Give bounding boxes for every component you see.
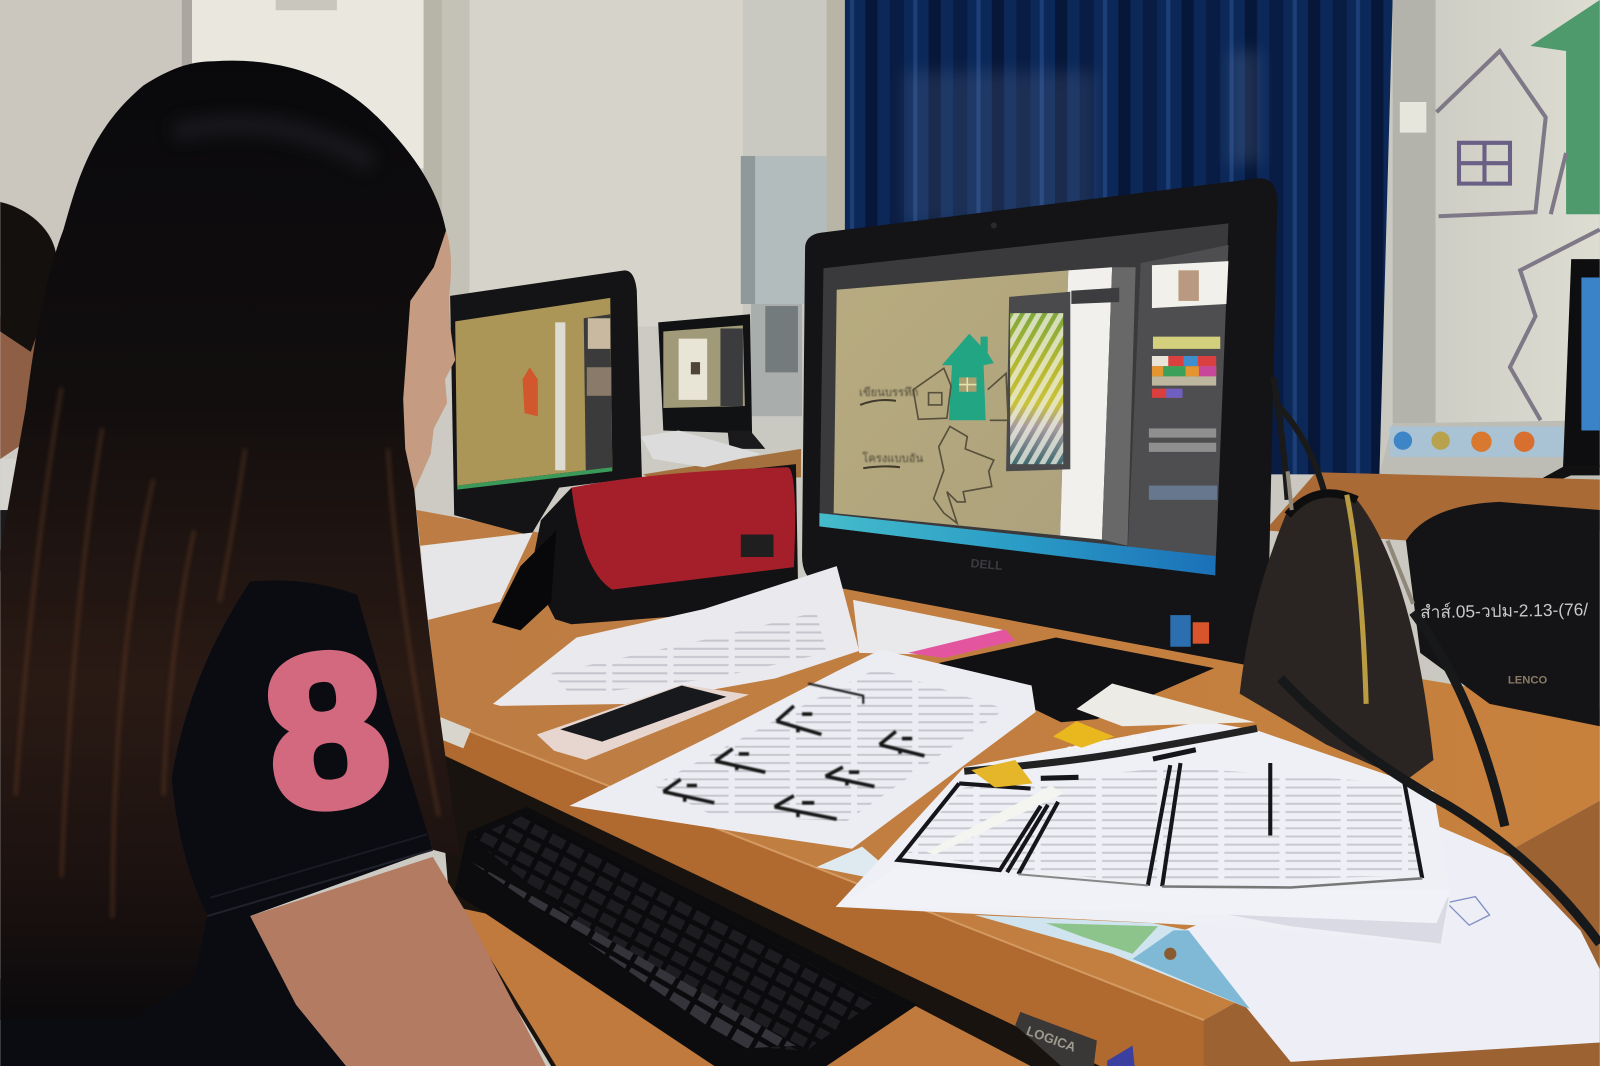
white stylus pen: [926, 785, 1063, 855]
main monitor: DELL: [970, 556, 1004, 573]
black chair: [1406, 502, 1600, 726]
colour swatches panel: [1152, 356, 1216, 398]
black chair: สำส์.05-วปม-2.13-(76/: [1420, 599, 1588, 622]
large form sheet: [836, 721, 1451, 947]
form frame lines: [898, 728, 1422, 887]
back desks: [643, 449, 1600, 541]
sheet and pink marker behind monitor: [853, 600, 1015, 658]
bottom logo label: [1015, 1012, 1135, 1066]
monitor screen: [819, 223, 1228, 575]
monitor stand: [939, 638, 1214, 722]
swatch window: [1006, 288, 1119, 471]
woman: long dark hair: [0, 61, 460, 1020]
woman: face: [388, 231, 455, 491]
blue leaflet: [816, 847, 1250, 1009]
workbook: [569, 650, 1036, 849]
large form sheet: ภาพรวมโครงสร้าง: [1065, 731, 1148, 756]
sheet at handbag foot: [1076, 683, 1255, 726]
yellow candy wrappers: [971, 721, 1114, 788]
drawing: green house and map: โครงแบบอัน: [862, 451, 923, 465]
sheet left of bag: [421, 532, 533, 620]
papers on back desk: [641, 430, 760, 467]
black chair: LENCO: [1508, 674, 1547, 686]
keyboard tray: [459, 908, 1031, 1066]
blue curtain: [845, 0, 1394, 474]
back monitor far right: [1525, 259, 1600, 490]
woman: arm: [250, 857, 546, 1066]
person at far left: [0, 202, 57, 571]
woman: black shirt: [0, 571, 433, 1066]
paper stack behind phone: [493, 566, 859, 706]
back left monitor: [450, 270, 642, 536]
smartphone: [537, 684, 749, 760]
drawing: green house and map: เขียนบรรทึก: [859, 386, 918, 399]
red messenger bag: [492, 464, 798, 630]
white paper underneath: [1184, 826, 1600, 1062]
projection screen: [1379, 0, 1600, 479]
shirt number 8: 8: [254, 606, 400, 855]
drawing: green house and map: [859, 334, 1008, 523]
second back monitor: [658, 314, 765, 449]
main monitor: [802, 178, 1277, 666]
electrical cabinet: [741, 156, 827, 416]
workbook diagrams: [663, 683, 924, 819]
main desk: [416, 510, 1600, 1066]
bag straps: [1280, 612, 1600, 944]
under-desk shadow: [434, 714, 1204, 1066]
black handbag: [1240, 377, 1433, 780]
keyboard: [454, 807, 917, 1066]
bottom logo label: LOGICA: [1024, 1023, 1078, 1055]
